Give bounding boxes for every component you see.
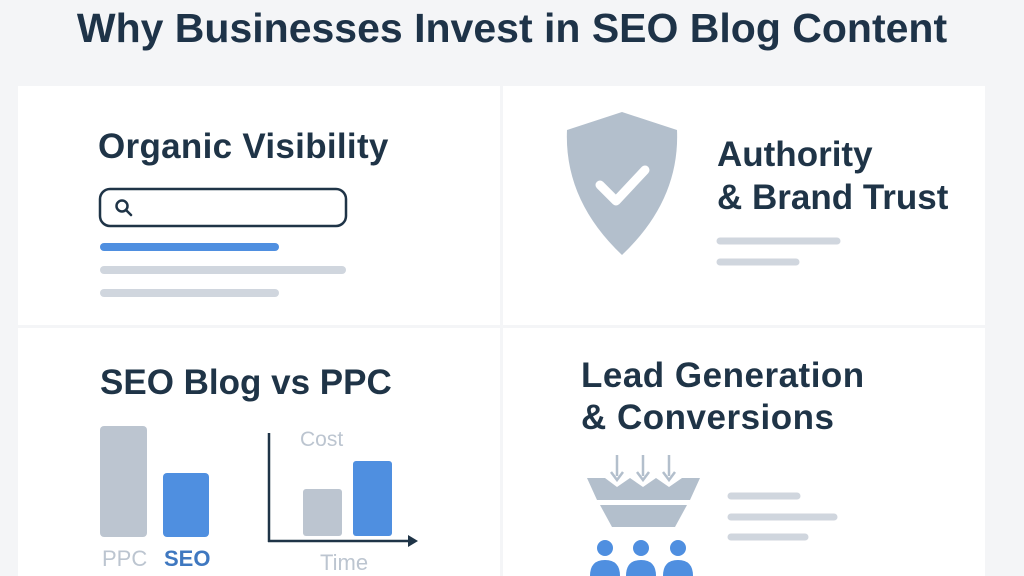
icon: people [590, 540, 693, 576]
heading: authority [717, 135, 948, 217]
icon: funnel [587, 455, 700, 527]
heading: lead generation: Lead Generation [581, 356, 865, 395]
bar chart: ppc vs seo: SEO [164, 546, 210, 571]
authority lines [720, 241, 837, 262]
icon: shield [567, 112, 677, 255]
heading: organic visibility: Organic Visibility [98, 127, 389, 166]
heading: lead generation [581, 356, 865, 437]
heading: seo blog vs ppc: SEO Blog vs PPC [100, 363, 392, 402]
search box [100, 189, 346, 226]
panel: lead generation [503, 328, 985, 576]
bar chart: ppc vs seo: PPC [102, 546, 147, 571]
result lines [104, 247, 342, 293]
heading: lead generation: & Conversions [581, 398, 834, 437]
panel: authority [503, 86, 985, 325]
chart: cost over time [268, 428, 418, 575]
title: Why Businesses Invest in SEO Blog Content [77, 5, 947, 51]
chart: cost over time: Cost [300, 428, 343, 451]
heading: authority: & Brand Trust [717, 178, 948, 217]
panel: seo vs ppc [18, 328, 500, 576]
chart: cost over time: Time [320, 550, 368, 575]
heading: authority: Authority [717, 135, 873, 174]
panel: organic visibility [18, 86, 500, 325]
bar chart: ppc vs seo [100, 426, 210, 571]
lead lines [731, 496, 834, 537]
